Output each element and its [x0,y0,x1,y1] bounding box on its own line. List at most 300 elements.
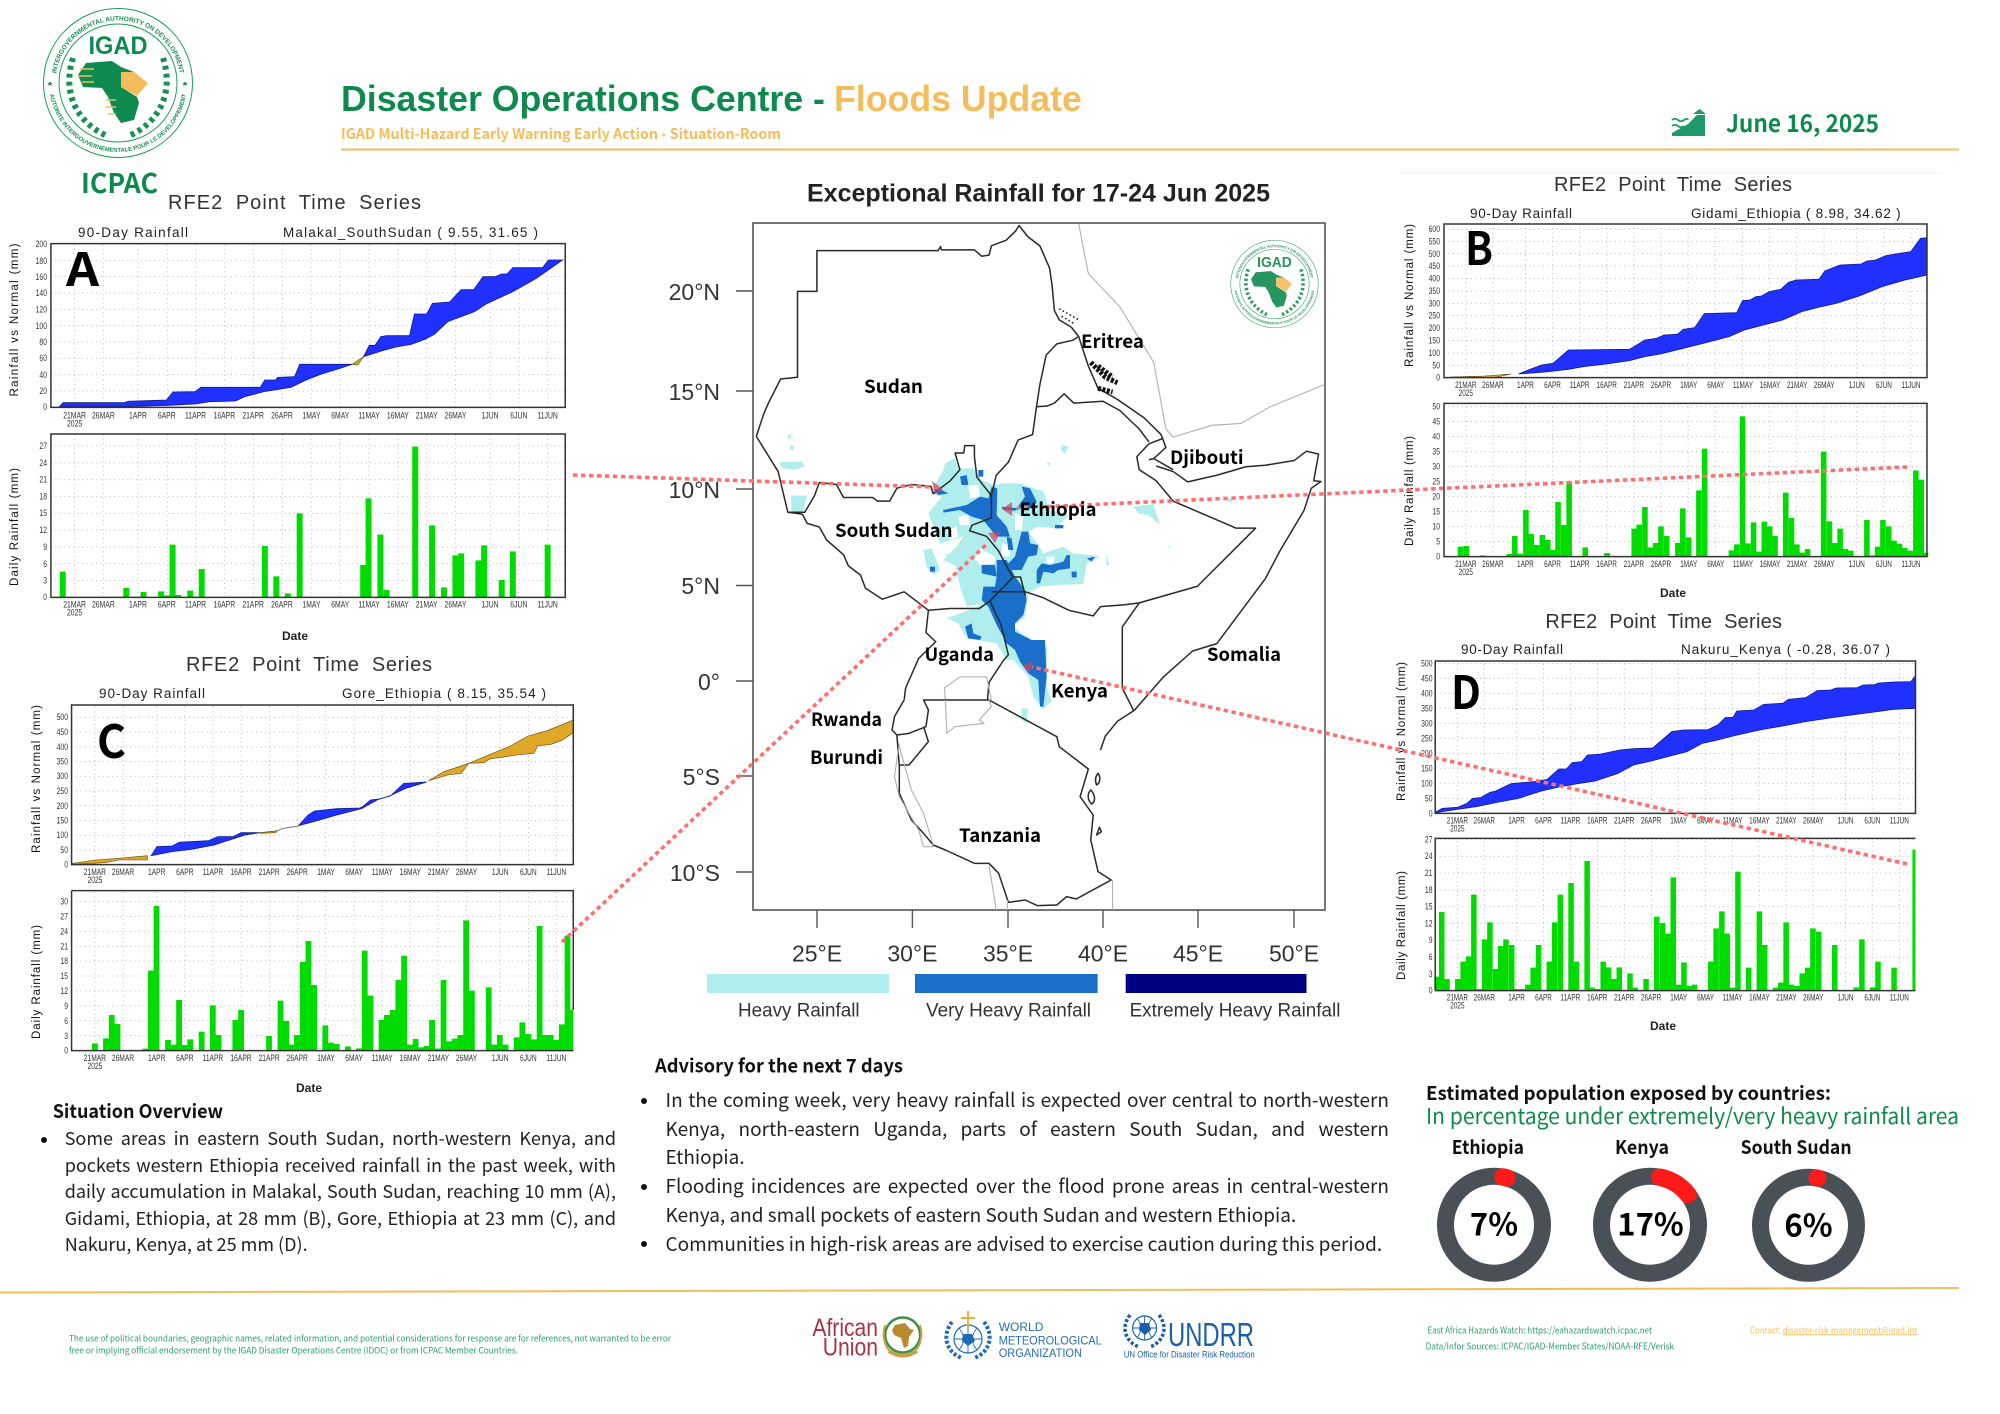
chart B y axis labels: 40 [1432,432,1440,442]
country labels: Djibouti [1170,444,1244,470]
chart D x axis labels: 21MAR [1447,815,1468,826]
chart C y axis labels: Daily Rainfall (mm) [31,925,43,1039]
title: Disaster Operations Centre - [341,79,825,119]
chart A x axis labels: 1MAY [302,600,321,610]
chart D x axis labels: 11APR [1561,992,1580,1003]
chart C x axis labels: 21MAY [428,867,450,877]
title: Floods Update [834,79,1082,119]
chart C x axis labels: 6JUN [520,867,537,877]
chart C x axis labels: 1APR [148,867,165,877]
chart D x axis labels: 26APR [1641,992,1661,1003]
donut: Ethiopia: 7% [1470,1200,1518,1245]
chart C x axis labels [84,867,566,1095]
chart A x axis labels: 6APR [158,410,176,421]
chart C x axis labels: 26APR [287,1053,308,1063]
chart B y axis labels: Rainfall vs Normal (mm) [1404,224,1416,367]
chart A x axis labels: 11MAY [358,600,380,610]
chart D x axis labels: 16MAY [1749,815,1770,826]
chart A x axis labels: 26MAR [92,600,115,610]
chart A x axis labels: 1APR [129,410,147,421]
chart A x axis labels: 26MAY [445,600,467,610]
chart D y axis labels: 400 [1421,688,1433,699]
chart C x axis labels: 6JUN [520,1053,537,1063]
chart A y axis labels: 80 [39,337,47,347]
chart C subtitles [99,686,546,701]
panel: chart C Gore [31,654,573,1095]
chart D x axis labels: 6MAY [1697,815,1715,826]
chart D y axis labels: 50 [1425,793,1433,804]
country borders south [892,700,1113,910]
chart B y axis labels: 25 [1432,477,1440,487]
chart B y axis labels: 450 [1429,261,1440,271]
map legend: Very Heavy Rainfall [926,1001,1091,1022]
chart D x axis labels: 11JUN [1890,815,1909,826]
chart D x axis labels: 21APR [1614,815,1634,826]
chart D x axis labels: 11MAY [1723,815,1743,826]
chart C y axis labels: 250 [57,786,68,796]
logo: World Meteorological Organization: METEOROLOGICAL [999,1333,1102,1347]
chart B x axis labels: Date [1660,586,1686,600]
chart A y axis labels [9,239,47,602]
chart A x axis labels: 1APR [129,600,147,610]
chart C y axis labels: 50 [60,845,68,855]
chart C y axis labels: 27 [60,911,68,922]
chart B x axis labels: 1MAY [1680,559,1698,569]
chart A x axis labels: 26APR [271,600,293,610]
chart D y axis labels: 9 [1429,935,1433,945]
chart B x axis labels: 6JUN [1876,380,1892,390]
chart B y axis labels: 100 [1429,348,1440,358]
chart C y axis labels: 9 [64,1001,68,1011]
chart A y axis labels: 12 [39,525,47,535]
chart D x axis labels: 2025 [1450,823,1465,834]
text block: situation overview: Some areas in eastern South Sudan, north-western Kenya, and [65,1125,616,1151]
text block: situation overview: daily accumulation in Malakal, South Sudan, reaching 10 mm (A), [65,1178,616,1204]
chart C y axis labels: 350 [57,756,68,767]
chart B x axis labels: 1MAY [1680,380,1698,390]
chart A subtitles: 90-Day Rainfall [78,225,188,240]
chart B y axis labels: 0 [1436,373,1440,383]
chart B x axis labels: 21APR [1624,559,1644,569]
chart A y axis labels: 27 [39,441,47,451]
chart A x axis labels: 6JUN [510,600,527,610]
map title: Exceptional Rainfall for 17-24 Jun 2025 [807,180,1270,208]
chart A x axis labels: 6MAY [331,600,350,610]
chart B y axis labels: 350 [1429,286,1440,296]
chart D x axis labels: 1JUN [1838,992,1854,1003]
chart A x axis labels: 16APR [214,600,235,610]
chart C x axis labels: 2025 [87,1061,103,1071]
chart D y axis labels: Daily Rainfall (mm) [1396,871,1408,980]
chart D subtitles: Nakuru_Kenya ( -0.28, 36.07 ) [1681,642,1890,657]
chart B x axis labels: 2025 [1459,388,1473,398]
text block: advisory: Communities in high-risk areas are advised to exercise caution during this period. [666,1230,1382,1257]
chart B x axis labels: 6APR [1544,559,1561,569]
country labels: Burundi [810,744,883,770]
chart D y axis labels: 15 [1425,902,1433,912]
country labels [810,328,1281,848]
chart C y axis labels: 450 [57,727,68,737]
chart B x axis labels: 21MAY [1787,380,1808,390]
chart B y axis labels: Daily Rainfall (mm) [1404,436,1416,546]
chart C x axis labels: 11APR [203,867,223,877]
chart D y axis labels: Rainfall vs Normal (mm) [1396,662,1408,801]
chart A x axis labels: 21MAR [63,600,86,610]
chart D y axis labels: 300 [1421,718,1433,729]
chart B x axis labels: 26MAR [1482,380,1504,390]
chart A y axis labels: 20 [39,386,47,396]
chart A y axis labels: 60 [39,353,47,363]
donut: Ethiopia: Ethiopia [1452,1133,1524,1160]
chart C x axis labels: 1JUN [492,867,509,877]
country labels: South Sudan [835,517,953,543]
chart D x axis labels: 1JUN [1838,815,1854,826]
leader lines from charts to map points [562,467,1907,942]
chart C x axis labels: 21MAY [428,1053,450,1063]
chart A y axis labels: 21 [39,474,47,485]
chart A x axis labels: 16MAY [387,600,409,610]
chart B x axis labels: 16APR [1597,559,1617,569]
country labels: Eritrea [1081,328,1144,354]
chart D subtitles: 90-Day Rainfall [1461,642,1563,657]
chart D y axis labels: 250 [1421,733,1433,744]
chart A y axis labels: 180 [36,256,47,266]
chart C x axis labels: 26APR [287,867,308,877]
chart C x axis labels: 1MAY [317,867,335,877]
footer links [1426,1323,1918,1352]
chart B x axis labels [1455,380,1921,600]
text block: situation overview: pockets western Ethiopia received rainfall in the past week, with [65,1152,616,1178]
footer rule [0,1288,1959,1292]
chart B y axis labels [1404,224,1440,562]
chart A x axis labels: 6JUN [510,410,527,421]
chart D y axis labels: 450 [1421,673,1433,684]
country labels: Sudan [864,373,923,399]
chart C x axis labels: 21MAR [84,1053,106,1063]
chart A x axis labels: 2025 [67,418,83,429]
chart B x axis labels: 11APR [1570,380,1590,390]
chart C x axis labels: 1APR [148,1053,165,1063]
text block: advisory: Ethiopia. [666,1143,745,1170]
chart D y axis labels: 24 [1425,851,1433,861]
logo: IGAD emblem: AUTORITE INTERGOUVERNEMENTALE POUR LE DEVELOPPEMENT [50,94,186,152]
chart A y axis labels: 120 [36,304,47,315]
chart B y axis labels: 200 [1429,323,1440,333]
chart A x axis labels: 1JUN [481,600,499,610]
letter A: A [65,234,100,300]
longitude labels: 50°E [1269,941,1319,967]
panel: chart B Gidami [1404,174,1927,600]
chart D y axis labels: 12 [1425,918,1433,929]
map legend: Heavy Rainfall [738,1001,860,1022]
donut: South Sudan [1741,1133,1856,1273]
chart A plots [51,244,565,597]
chart A y axis labels: 200 [36,239,47,249]
country labels: Kenya [1051,678,1108,704]
chart B subtitles [1470,206,1901,221]
chart C x axis labels: 2025 [87,875,103,885]
donut: Kenya: 17% [1617,1200,1684,1245]
chart C y axis labels: 150 [57,815,68,826]
text block: advisory: Flooding incidences are expected over the flood prone areas in central-western [666,1172,1389,1199]
chart B x axis labels: 2025 [1459,567,1473,577]
chart D plots [1435,661,1915,991]
donut: South Sudan: 6% [1784,1201,1833,1246]
chart B x axis labels: 26APR [1651,559,1671,569]
chart B x axis labels: 6JUN [1876,559,1892,569]
chart A y axis labels: 15 [39,508,47,518]
chart B y axis labels: 50 [1432,402,1440,412]
inset logo: IGAD emblem [1230,240,1318,328]
exposure subheading: In percentage under extremely/very heavy rainfall area [1426,1099,1959,1131]
logo caption: ICPAC: ICPAC [81,162,158,201]
header rule [341,148,1959,150]
donut: South Sudan: South Sudan [1741,1133,1852,1160]
chart B y axis labels: 45 [1432,417,1440,427]
chart B y axis labels: 150 [1429,335,1440,346]
chart A x axis labels: 11MAY [358,410,380,421]
chart A y axis labels: 18 [39,491,47,502]
chart B x axis labels: 21MAR [1455,380,1477,390]
chart B x axis labels: 16APR [1597,380,1617,390]
chart D x axis labels: 1APR [1508,815,1525,826]
chart C x axis labels: 11MAY [372,1053,393,1063]
chart B plots [1444,224,1927,557]
icon: flood house on hill [1672,109,1706,136]
chart A subtitles [78,225,538,240]
map legend: Extremely Heavy Rainfall [1130,1001,1340,1022]
chart C y axis labels: 6 [64,1016,68,1026]
chart A y axis labels: 24 [39,458,47,468]
chart A y axis labels: Daily Rainfall (mm) [9,468,21,586]
chart C y axis labels: Rainfall vs Normal (mm) [31,705,43,853]
chart D y axis labels: 27 [1425,834,1433,845]
chart C x axis labels: 11APR [203,1053,223,1063]
chart B x axis labels: 26APR [1651,380,1671,390]
longitude labels: 40°E [1078,941,1128,967]
logo: World Meteorological Organization: ORGANIZATION [999,1346,1082,1360]
chart B x axis labels: 11MAY [1733,380,1753,390]
chart C x axis labels: 6MAY [345,867,363,877]
chart A x axis labels: 21APR [242,410,264,421]
chart C x axis labels: 11JUN [547,867,566,877]
chart B y axis labels: 50 [1432,360,1440,371]
panel: chart D Nakuru [1396,611,1915,1033]
chart D x axis labels: 21APR [1614,992,1634,1003]
chart D x axis labels: 26MAY [1803,992,1824,1003]
chart A x axis labels: 16APR [214,410,235,421]
letter D: D [1451,657,1481,723]
footer links: disaster-risk-management@igad.int [1783,1323,1918,1336]
latitude labels: 5°S [683,764,720,790]
chart B y axis labels: 10 [1432,522,1440,532]
chart C y axis labels: 200 [57,801,68,811]
chart B y axis labels: 300 [1429,298,1440,309]
chart A y axis labels: Rainfall vs Normal (mm) [9,243,21,396]
chart C x axis labels: 16APR [230,867,252,877]
logo: UNDRR: UNDRR [1168,1316,1254,1353]
chart D y axis labels: 200 [1421,748,1433,759]
chart C x axis labels: 21APR [259,867,280,877]
chart B x axis labels: 11APR [1570,559,1590,569]
latitude labels: 20°N [669,279,720,305]
chart D x axis labels: 6JUN [1864,815,1880,826]
chart A y axis labels: 100 [36,321,47,331]
chart B x axis labels: 11JUN [1901,559,1921,569]
chart D x axis labels: 6APR [1535,815,1552,826]
exposure heading: Estimated population exposed by countries: [1426,1079,1831,1106]
latitude labels: 0° [698,669,720,695]
chart D x axis labels: 11MAY [1723,992,1743,1003]
chart D x axis labels: 6JUN [1864,992,1880,1003]
donut: Ethiopia [1446,1133,1542,1273]
chart D x axis labels: 6MAY [1697,992,1715,1003]
chart C y axis labels: 100 [57,830,68,840]
chart C y axis labels: 21 [60,941,68,952]
chart C x axis labels: 11MAY [372,867,393,877]
inset logo: IGAD emblem: INTERGOVERNMENTAL AUTHORITY ON DEVELOPMENT [1236,244,1314,278]
panel: rainfall map [560,180,1908,1022]
chart C y axis labels: 18 [60,956,68,966]
chart C y axis labels: 15 [60,971,68,981]
chart A x axis labels: 2025 [67,608,83,618]
chart A x axis labels: 26MAY [445,410,467,421]
chart C x axis labels: 1JUN [492,1053,509,1063]
chart C y axis labels: 0 [64,860,68,870]
chart D x axis labels: 26MAR [1474,815,1495,826]
chart D y axis labels: 150 [1421,763,1433,774]
chart D x axis labels: Date [1650,1019,1676,1033]
chart B y axis labels: 0 [1436,552,1440,562]
chart B x axis labels: 26MAY [1814,559,1835,569]
chart B y axis labels: 600 [1429,224,1440,234]
chart B y axis labels: 15 [1432,507,1440,517]
chart A x axis labels: 11APR [185,600,206,610]
chart A y axis labels: 0 [43,402,47,412]
chart D y axis labels: 18 [1425,885,1433,895]
chart C x axis labels: 1MAY [317,1053,335,1063]
chart A x axis labels: Date [282,629,308,643]
logo: IGAD emblem: INTERGOVERNMENTAL AUTHORITY ON DEVELOPMENT [52,16,184,73]
logo: World Meteorological Organization: WORLD [999,1320,1044,1334]
text block: advisory: In the coming week, very heavy rainfall is expected over central to north-western [666,1086,1389,1113]
chart D y axis labels: 500 [1421,658,1433,669]
chart C x axis labels: 21MAR [84,867,106,877]
north western rain patch [780,435,807,512]
chart D y axis labels: 350 [1421,703,1433,714]
chart C y axis labels [31,705,68,1056]
chart B x axis labels: 26MAY [1814,380,1835,390]
panel: chart A Malakal [9,192,565,643]
donut: Kenya: Kenya [1615,1133,1669,1160]
rainfall field [923,445,1233,723]
chart D subtitles [1461,642,1890,657]
chart C y axis labels: 24 [60,926,68,937]
chart C subtitles: Gore_Ethiopia ( 8.15, 35.54 ) [342,686,546,701]
chart A x axis labels: 6APR [158,600,176,610]
latitude labels: 10°S [670,860,720,886]
chart C y axis labels: 300 [57,771,68,781]
chart A x axis labels [63,410,558,643]
chart D x axis labels: 26MAY [1803,815,1824,826]
chart D x axis labels: 11APR [1561,815,1580,826]
country labels: Tanzania [959,822,1041,848]
chart D x axis labels: 16APR [1587,815,1608,826]
chart D x axis labels: 26APR [1641,815,1661,826]
chart B x axis labels: 11JUN [1901,380,1921,390]
footer disclaimer: The use of political boundaries, geographic names, related information, and potential considerations for response are for references, not warranted to be error [69,1333,672,1345]
latitude labels: 10°N [669,477,720,503]
text block: situation overview: Gidami, Ethiopia, at 28 mm (B), Gore, Ethiopia at 23 mm (C), and [65,1204,616,1230]
text block: advisory [641,1086,1389,1257]
chart C y axis labels: 3 [64,1031,68,1041]
letter B: B [1465,213,1493,279]
chart D x axis labels: 26MAR [1474,992,1495,1003]
panel: population exposure [1426,1079,1959,1273]
letter C: C [97,706,126,772]
chart A x axis labels: 1MAY [302,410,321,421]
chart C x axis labels: 26MAY [456,867,478,877]
chart D x axis labels: 16APR [1587,992,1608,1003]
logo: UNDRR: UN Office for Disaster Risk Reduction [1124,1350,1255,1360]
chart B x axis labels: 21MAR [1455,559,1477,569]
footer links: Contact: [1750,1323,1781,1336]
longitude labels: 45°E [1173,941,1223,967]
chart D x axis labels: 2025 [1450,1000,1465,1011]
chart A x axis labels: 1JUN [481,410,499,421]
chart A y axis labels: 160 [36,272,47,282]
chart B x axis labels: 21APR [1624,380,1644,390]
chart C y axis labels: 12 [60,986,68,996]
chart D x axis labels: 1MAY [1670,992,1688,1003]
chart C x axis labels: 6APR [176,867,194,877]
footer disclaimer: free or implying official endorsement by the IGAD Disaster Operations Centre (IDOC) or from ICPAC Member Countries. [69,1344,518,1356]
logo: African Union: African [812,1314,878,1342]
footer disclaimer [69,1333,672,1356]
chart D x axis labels: 16MAY [1749,992,1770,1003]
country labels: Uganda [924,641,994,667]
chart B x axis labels: 1JUN [1849,559,1865,569]
text block: situation overview: Nakuru, Kenya, at 25 mm (D). [65,1231,308,1257]
chart B x axis labels: 1APR [1517,380,1534,390]
chart B y axis labels: 20 [1432,492,1440,502]
donut: Kenya [1602,1133,1698,1273]
chart D x axis labels: 1APR [1508,992,1525,1003]
chart C x axis labels: 26MAR [112,1053,134,1063]
subtitle: IGAD Multi-Hazard Early Warning Early Action - Situation-Room [341,123,781,144]
chart B x axis labels: 1APR [1517,559,1534,569]
chart D y axis labels: 0 [1429,986,1433,996]
chart A subtitles: Malakal_SouthSudan ( 9.55, 31.65 ) [283,225,538,240]
chart C x axis labels: 6APR [176,1053,194,1063]
chart B x axis labels: 6MAY [1707,559,1725,569]
chart A y axis labels: 140 [36,288,47,298]
chart D y axis labels: 0 [1429,808,1433,819]
chart B y axis labels: 35 [1432,447,1440,457]
logo: African Union: Union [823,1334,878,1362]
chart A x axis labels: 26APR [271,410,293,421]
chart B y axis labels: 5 [1436,537,1440,547]
chart A x axis labels: 11JUN [537,600,558,610]
chart A x axis labels: 6MAY [331,410,350,421]
chart B x axis labels: 6APR [1544,380,1561,390]
chart B x axis labels: 16MAY [1760,380,1781,390]
chart D y axis labels: 6 [1429,952,1433,962]
footer links: East Africa Hazards Watch: https://eahazardswatch.icpac.net [1428,1323,1653,1336]
chart A x axis labels: 11JUN [537,410,558,421]
chart B subtitles: Gidami_Ethiopia ( 8.98, 34.62 ) [1691,206,1901,221]
chart A x axis labels: 21APR [242,600,264,610]
